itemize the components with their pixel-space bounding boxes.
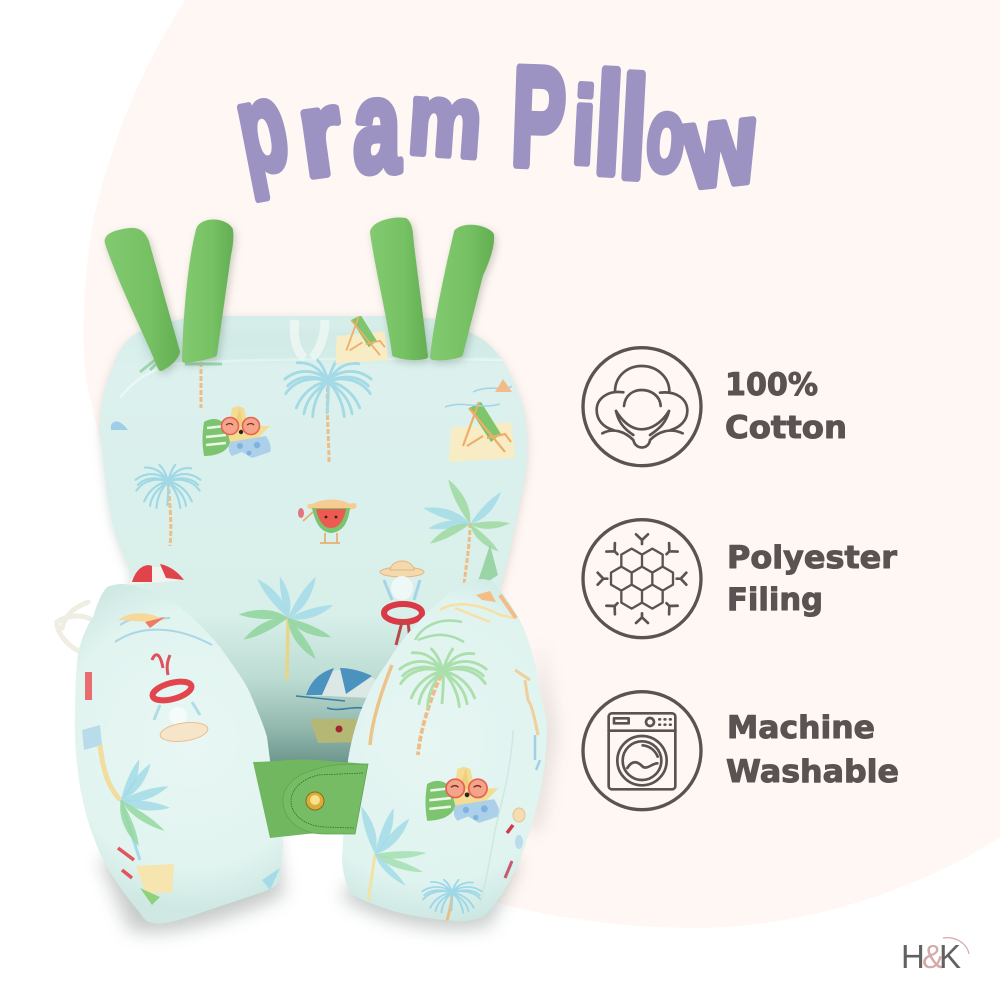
- feature: 100% cotton: [583, 348, 847, 466]
- label: Polyester Filing: [727, 540, 898, 618]
- lower palm: [361, 806, 426, 900]
- green strap with snap: [253, 759, 368, 838]
- title: Pram Pillow: m: [405, 60, 486, 180]
- edge print lines: [445, 386, 512, 407]
- back rest fabric: [100, 316, 527, 770]
- strap back: [253, 759, 368, 838]
- icon: hexagon fibres: [583, 520, 701, 638]
- left neck pad: [57, 584, 283, 923]
- right edge print: [505, 670, 540, 878]
- left pad fabric: [75, 584, 283, 923]
- bottom palm: [422, 880, 482, 925]
- left edge stripes: [85, 672, 92, 700]
- pineapple character: [426, 767, 499, 823]
- title: Pram Pillow: l: [591, 44, 626, 204]
- H&K logo: &: [922, 938, 944, 975]
- watermelon character: [298, 500, 357, 543]
- blue umbrella: [296, 668, 376, 709]
- icon: cotton boll: [583, 348, 701, 466]
- icon: washing machine: [583, 692, 701, 810]
- title: Pram Pillow: P: [509, 39, 568, 197]
- hat duck with ring: [380, 561, 424, 645]
- upside-down character: [151, 655, 209, 744]
- feature: machine washable: [583, 692, 899, 810]
- left pad print: [82, 613, 280, 905]
- strap flap: [283, 764, 368, 834]
- title: Pram Pillow: i: [570, 66, 598, 187]
- title: Pram Pillow: a: [354, 55, 401, 200]
- label: Machine Washable: Machine: [727, 710, 875, 746]
- title: Pram Pillow: p: [226, 55, 298, 202]
- red umbrella: [128, 564, 184, 585]
- title: Pram Pillow: r: [291, 64, 350, 202]
- label: 100% Cotton: 100%: [725, 367, 818, 403]
- label: Machine Washable: [726, 710, 899, 790]
- green ears: [108, 221, 491, 368]
- palm left: [136, 465, 200, 546]
- green palm: [400, 649, 486, 755]
- pineapple character: [202, 406, 271, 458]
- palm behind ears: [139, 359, 222, 408]
- tag loop: [57, 602, 92, 652]
- label: Polyester Filing: Filing: [727, 582, 823, 618]
- label: Polyester Filing: Polyester: [727, 540, 898, 576]
- seam: [480, 730, 513, 905]
- H&K logo: K: [939, 938, 961, 975]
- H&K logo: H: [901, 938, 925, 975]
- drop shadows: [100, 640, 556, 932]
- ear 1: [108, 231, 177, 368]
- label: 100% Cotton: Cotton: [725, 410, 847, 446]
- brass snap: [306, 792, 324, 810]
- label: 100% Cotton: [725, 367, 847, 446]
- left pad palm: [120, 760, 170, 860]
- stitching: [291, 773, 363, 828]
- right edge print: [262, 768, 276, 802]
- tag loop top: [294, 320, 325, 358]
- back rest print: [111, 315, 515, 743]
- snap highlight: [310, 795, 320, 805]
- palm right: [422, 479, 510, 590]
- back rest: [100, 315, 527, 770]
- title: Pram Pillow: w: [677, 78, 763, 213]
- right pad fabric: [342, 579, 547, 921]
- title: Pram Pillow: l: [616, 48, 651, 208]
- right pad print: [351, 591, 540, 925]
- deck chair right: [449, 402, 515, 462]
- small blue cloud: [111, 421, 128, 430]
- title: Pram Pillow: [226, 39, 763, 213]
- sun: [495, 379, 512, 392]
- H&K logo: [901, 938, 969, 975]
- title: Pram Pillow: o: [642, 74, 690, 196]
- trunk at inner edge: [370, 665, 392, 745]
- ear 4: [433, 228, 491, 357]
- ear 2: [185, 222, 230, 360]
- feature: polyester filling: [583, 520, 898, 638]
- palm top center: [285, 359, 371, 462]
- centre palm: [238, 573, 334, 680]
- ear 3: [373, 221, 425, 357]
- right neck pad: [342, 579, 547, 925]
- deck chair top: [335, 315, 388, 363]
- pram pillow product: [57, 221, 556, 932]
- label: Machine Washable: Washable: [726, 754, 899, 790]
- beach mat: [310, 719, 358, 743]
- small ring and chair: [118, 848, 134, 878]
